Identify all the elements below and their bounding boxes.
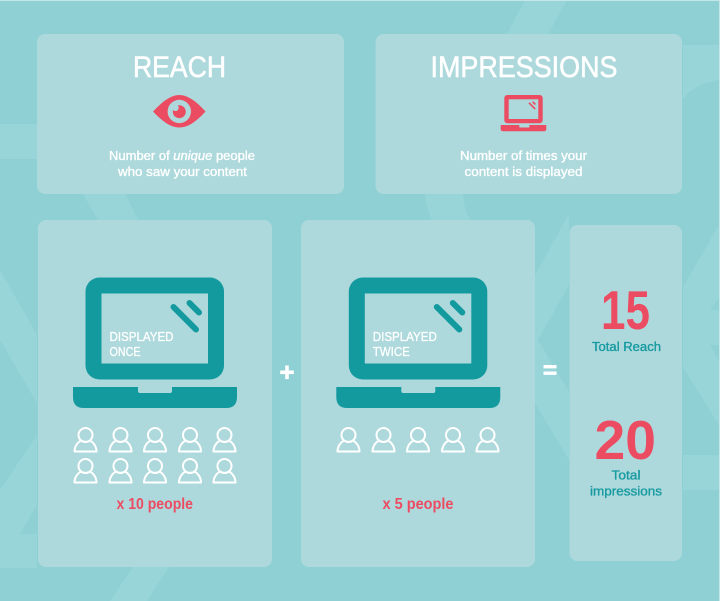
text: reach definition: who saw your content — [117, 164, 247, 179]
icon: ten people — [74, 428, 236, 482]
icon: laptop displayed twice — [336, 278, 500, 408]
icon: laptop displayed once: ONCE — [110, 344, 141, 359]
stat: total impressions — [590, 409, 663, 498]
icon: laptop displayed twice: DISPLAYED — [373, 329, 437, 344]
panel: reach — [37, 34, 344, 194]
text: reach definition — [109, 148, 255, 179]
panel: totals — [570, 225, 682, 561]
icon: eye — [153, 95, 206, 128]
panel: impressions — [376, 34, 682, 194]
stat: total reach: Total Reach — [592, 339, 661, 354]
stat: total impressions: Total — [612, 468, 641, 482]
text: impressions definition — [460, 148, 588, 179]
stat: total impressions: impressions — [590, 484, 663, 498]
panel: displayed twice — [301, 220, 535, 567]
text: reach definition: Number of unique people — [109, 148, 255, 163]
stat: total impressions: 20 — [594, 409, 656, 471]
icon: plus — [280, 366, 294, 379]
icon: laptop displayed once — [73, 278, 237, 408]
heading: impressions: IMPRESSIONS — [430, 51, 618, 84]
label: x 10 people: x 10 people — [116, 496, 193, 513]
heading: reach: REACH — [133, 51, 226, 84]
icon: five people — [338, 428, 498, 452]
text: impressions definition: content is displayed — [464, 164, 582, 179]
text: impressions definition: Number of times your — [460, 148, 588, 163]
stat: total reach: 15 — [601, 279, 650, 341]
panel: displayed once — [38, 220, 272, 567]
icon: laptop displayed twice: TWICE — [373, 344, 410, 359]
icon: equals — [544, 365, 556, 375]
label: x 5 people: x 5 people — [382, 496, 454, 513]
icon: laptop — [501, 95, 546, 131]
icon: laptop displayed once: DISPLAYED — [110, 329, 174, 344]
